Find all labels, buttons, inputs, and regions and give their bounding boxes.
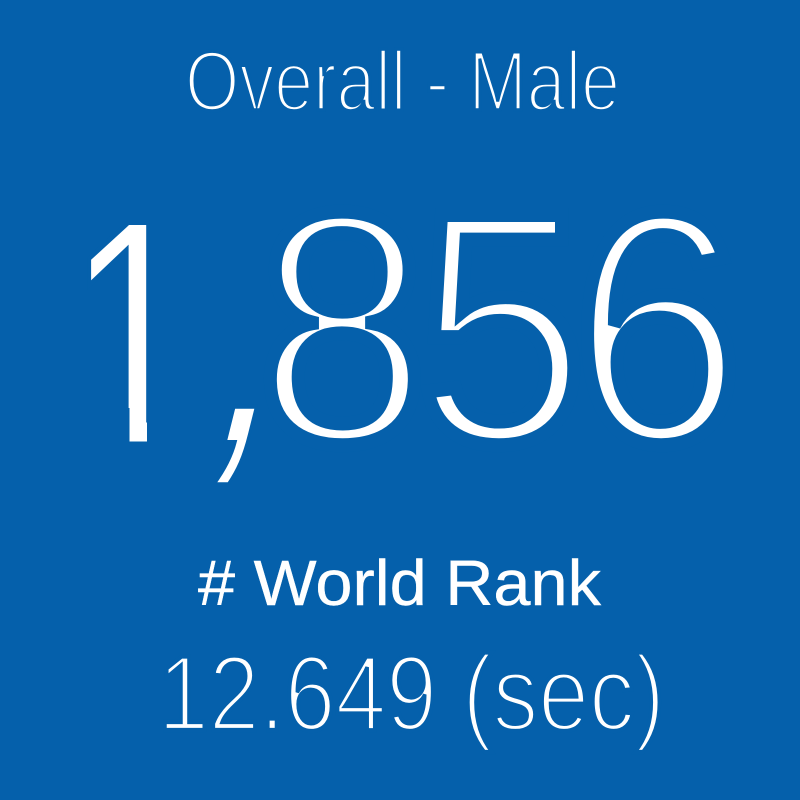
label: world rank: # World Rank (198, 547, 602, 619)
big number: world rank value: , (186, 143, 343, 512)
big number: world rank value (60, 143, 743, 513)
big number: world rank value: 5 (416, 144, 587, 512)
time value: 12.649 (sec) (158, 633, 665, 753)
big number: world rank value: 8 (257, 144, 428, 512)
big number: world rank value: 1 (66, 153, 200, 513)
title: Overall - Male (185, 34, 620, 128)
big number: world rank value: 6 (572, 144, 743, 512)
